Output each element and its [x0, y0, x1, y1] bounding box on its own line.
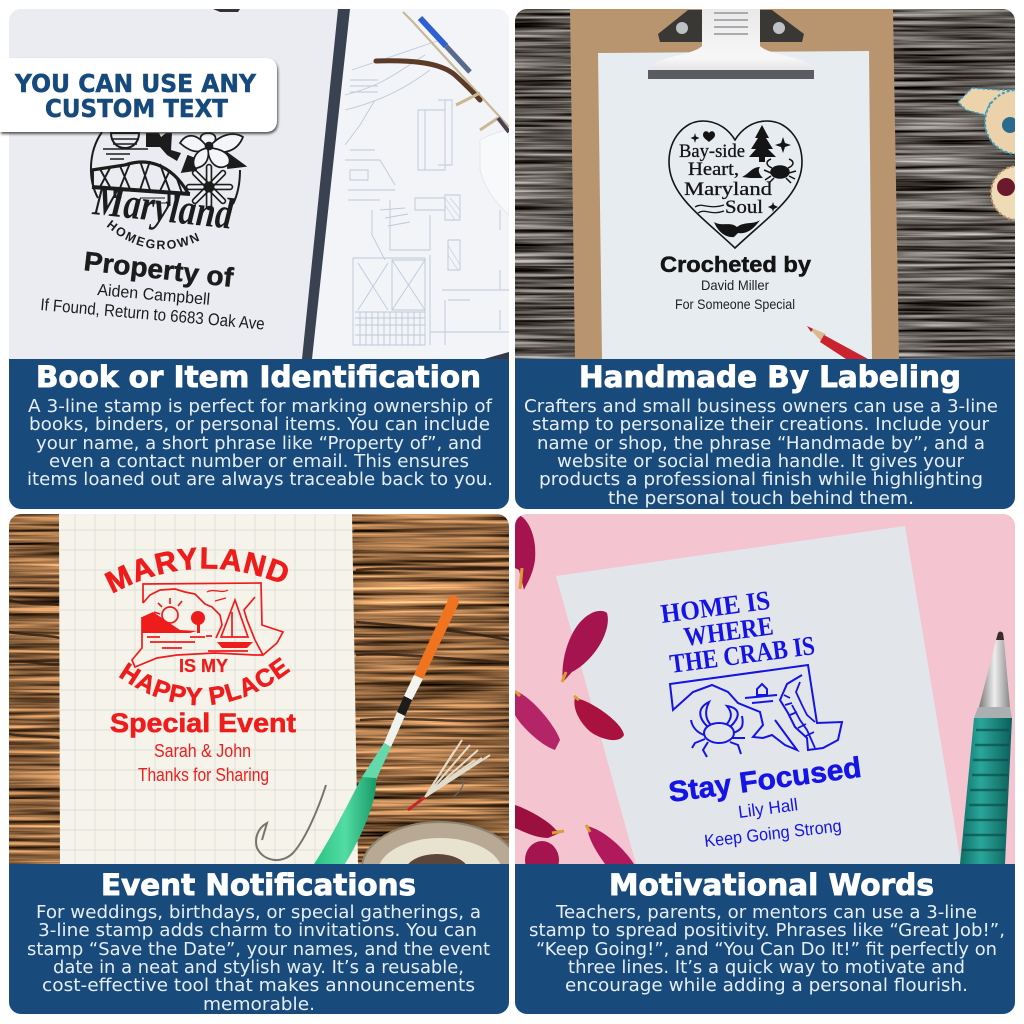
stamp: Maryland is my happy place: Thanks for Sharing: [138, 765, 269, 785]
body text: stamp to personalize their creations. Include your: [532, 415, 990, 435]
badge: custom text: YOU CAN USE ANY: [14, 69, 256, 98]
stamp: Home is where the crab is: Stay Focused: [667, 752, 863, 809]
stamp: Maryland is my happy place: HAPPY PLACE: [118, 657, 290, 706]
body text: three lines. It’s a quick way to motivate and: [568, 958, 965, 978]
body text: [524, 397, 998, 509]
icon: metal clip: [648, 9, 814, 79]
stamp: Bay-side Heart: Heart,: [688, 159, 739, 180]
stamp: Bay-side Heart: Soul: [725, 197, 763, 218]
stamp: Home is where the crab is: HOME IS: [659, 585, 772, 629]
icon: waves: [742, 167, 763, 178]
body text: [27, 397, 493, 490]
icon: fishing hook: [256, 785, 326, 860]
body text: memorable.: [203, 995, 315, 1015]
stamp: Maryland is my happy place: [104, 547, 296, 785]
caption band: [515, 359, 1015, 509]
icon: eyeglasses: [376, 12, 509, 215]
body text: even a contact number or email. This ensures: [49, 452, 469, 472]
icon: pen: [960, 632, 1012, 864]
stamp: Maryland Homegrown: Maryland: [90, 175, 236, 239]
stamp: Bay-side Heart: Bay-side: [679, 141, 745, 162]
icon: pencil shavings: [958, 87, 1015, 221]
body text: [27, 903, 490, 1015]
stamp: Home is where the crab is: WHERE: [682, 610, 775, 652]
body text: the personal touch behind them.: [608, 489, 914, 509]
body text: website or social media handle. It gives your: [557, 452, 965, 472]
stamp: Bay-side Heart: Crocheted by: [660, 252, 812, 277]
icon: crab: [764, 159, 796, 183]
stamp: Maryland is my happy place: Sarah & John: [154, 741, 251, 761]
icon: feather lure: [408, 740, 490, 810]
photo: notebook and blueprint: [9, 9, 509, 359]
stamp: Bay-side Heart: Maryland: [684, 179, 773, 200]
heading: Book or Item Identification: [36, 360, 481, 394]
stamp: Maryland Homegrown: Property of: [82, 246, 236, 293]
body text: A 3-line stamp is perfect for marking ownership of: [28, 397, 493, 417]
icon: crab: [691, 702, 745, 757]
icon: line spool: [361, 821, 509, 864]
caption band: [515, 864, 1015, 1014]
stamp: Bay-side Heart: For Someone Special: [675, 296, 795, 312]
icon: daisy: [189, 167, 230, 207]
icon: state outline: [670, 665, 842, 750]
photo: graph paper on brown wood: [9, 514, 509, 864]
stamp: Maryland Homegrown: HOMEGROWN: [106, 220, 200, 250]
body text: Teachers, parents, or mentors can use a 3-line: [555, 903, 977, 923]
stamp: Home is where the crab is: THE CRAB IS: [668, 630, 817, 679]
icon: petals: [515, 515, 634, 879]
icon: heart outline: [669, 121, 802, 248]
panel: Event Notifications: [9, 514, 509, 1014]
stamp: Bay-side Heart: [660, 121, 812, 312]
body text: cost-effective tool that makes announcements: [42, 976, 475, 996]
heading: Motivational Words: [609, 868, 934, 902]
body text: “Keep Going!”, and “You Can Do It!” fit perfectly on: [536, 940, 997, 960]
stamp: Maryland is my happy place: MARYLAND: [104, 547, 288, 594]
body text: name or shop, the phrase “Handmade by”, and a: [537, 434, 985, 454]
panel: Book or Item Identification: [9, 9, 509, 509]
photo: note on pink with petals: [515, 514, 1015, 879]
heading: Event Notifications: [101, 868, 416, 902]
caption band: [9, 864, 509, 1015]
stamp: Home is where the crab is: Keep Going Strong: [703, 815, 843, 851]
body text: [529, 903, 1005, 996]
badge: custom text: [0, 58, 277, 132]
body text: 3-line stamp adds charm to invitations. You can: [38, 921, 477, 941]
icon: fishing float: [314, 595, 459, 864]
body text: date in a neat and stylish way. It’s a reusable,: [53, 958, 464, 978]
panel: Motivational Words: [515, 514, 1015, 1014]
stamp: Home is where the crab is: Lily Hall: [737, 794, 799, 822]
panel: Handmade By Labeling: [515, 9, 1024, 509]
stamp: Maryland is my happy place: IS MY: [179, 656, 228, 676]
body text: encourage while adding a personal flourish.: [565, 976, 968, 996]
icon: tree: [749, 125, 776, 162]
icon: bridge: [92, 161, 190, 206]
icon: state outline with scene: [132, 583, 283, 667]
heading: Handmade By Labeling: [579, 360, 961, 394]
body text: products a professional finish while highlighting: [539, 470, 983, 490]
icon: large flower: [180, 133, 245, 172]
stamp: Maryland is my happy place: Special Event: [110, 708, 296, 738]
stamp: Bay-side Heart: David Miller: [701, 277, 769, 293]
stamp: Maryland Homegrown: If Found, Return to 6683 Oak Ave: [40, 295, 265, 334]
body text: books, binders, or personal items. You can include: [29, 415, 490, 435]
photo: clipboard on dark wood: [515, 9, 1024, 359]
body text: items loaned out are always traceable back to you.: [27, 470, 493, 490]
caption band: [9, 359, 509, 509]
body text: stamp “Save the Date”, your names, and the event: [27, 940, 490, 960]
stamp: Maryland Homegrown: Aiden Campbell: [97, 281, 211, 309]
body text: Crafters and small business owners can use a 3-line: [524, 397, 998, 417]
badge: custom text: CUSTOM TEXT: [45, 94, 228, 123]
body text: your name, a short phrase like “Property of”, and: [36, 434, 482, 454]
stamp: Home is where the crab is: [659, 585, 863, 851]
icon: heart and sparkles: [690, 131, 791, 212]
body text: stamp to spread positivity. Phrases like “Great Job!”,: [529, 921, 1005, 941]
body text: For weddings, birthdays, or special gatherings, a: [36, 903, 481, 923]
icon: pencil: [807, 326, 868, 359]
stamp: Maryland Homegrown: [41, 132, 264, 330]
